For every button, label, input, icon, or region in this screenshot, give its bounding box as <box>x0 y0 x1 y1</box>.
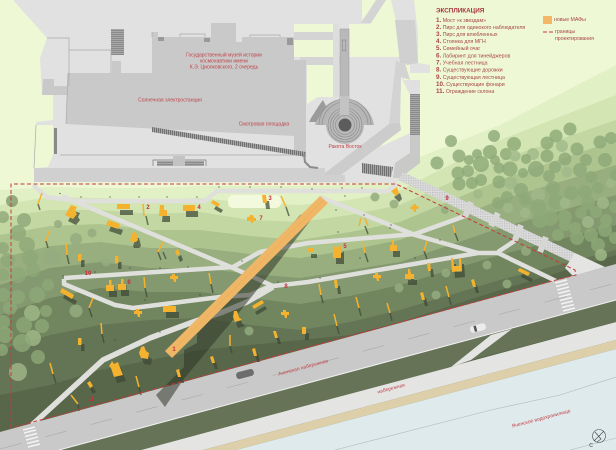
existing paths <box>32 183 556 425</box>
museum roof <box>42 23 306 154</box>
legend: project boundary: границы <box>555 29 575 35</box>
numbered markers: 9 <box>445 196 449 202</box>
map labels: Яченское водохранилище <box>511 408 571 430</box>
map labels: космонавтики имени <box>200 58 248 64</box>
explication list: 9. Существующая лестница <box>436 74 505 81</box>
icon: compass: С <box>589 443 593 449</box>
map labels <box>138 52 571 430</box>
explication list: 1. Мост «к звездам» <box>436 17 486 24</box>
map labels: Смотровая площадка <box>239 122 289 128</box>
numbered markers: 3 <box>268 196 272 202</box>
legend: project boundary <box>543 29 594 42</box>
explication list: 6. Лабиринт для тинейджеров <box>436 52 510 60</box>
amphitheatre <box>309 96 374 144</box>
curved stair by viewing deck <box>304 154 318 168</box>
tree cluster right <box>430 122 616 261</box>
legend: new MAF: новые МАФы <box>554 17 586 23</box>
explication list: 2. Пирс для одинокого наблюдателя <box>436 24 525 31</box>
numbered markers: 8 <box>284 284 288 290</box>
numbered markers: 2 <box>146 205 150 211</box>
map labels: Солнечная электростанция <box>138 98 202 104</box>
map labels: Государственный музей истории <box>186 52 262 58</box>
tree cluster left <box>0 195 54 381</box>
explication list <box>436 17 525 95</box>
numbered markers <box>85 196 449 403</box>
staircase 9 <box>398 172 575 262</box>
museum grounds and plaza <box>13 0 430 183</box>
explication list: 4. Стоянка для МГН <box>436 38 486 45</box>
embankment road and strips <box>0 253 616 450</box>
numbered markers: 4 <box>197 205 201 211</box>
numbered markers: 6 <box>127 280 131 286</box>
explication list: 5. Семейный очаг <box>436 45 480 52</box>
numbered markers: 7 <box>259 216 263 222</box>
pale terrace near pier 3 <box>228 195 281 208</box>
MAF shadows <box>38 193 533 411</box>
icon: compass <box>589 430 606 449</box>
map labels: набережная <box>377 382 406 396</box>
east stairs column <box>362 80 420 178</box>
cars <box>235 323 487 380</box>
diagonal staircase <box>152 127 306 157</box>
lamp dots (existing lanterns) <box>59 186 441 341</box>
building outlines <box>34 32 300 168</box>
numbered markers: 1 <box>172 347 176 353</box>
map labels: Анинская набережная <box>278 358 329 378</box>
numbered markers: 11 <box>88 397 95 403</box>
explication list: 7. Учебная лестница <box>436 60 488 66</box>
legend title: ЭКСПЛИКАЦИЯ <box>436 8 485 14</box>
bridge to the stars <box>165 196 328 358</box>
explication list: 10. Существующие фонари <box>436 81 505 88</box>
map labels: К.Э. Циолковского, 2 очередь <box>190 64 259 70</box>
entrance stairs <box>153 156 206 166</box>
numbered markers: 5 <box>343 244 347 250</box>
explication list: 11. Ограждение склона <box>436 88 494 95</box>
pedestrian crossings <box>23 280 575 447</box>
explication list: 8. Существующие дорожки <box>436 66 503 74</box>
new MAF elements <box>38 187 530 404</box>
explication list: 3. Пирс для влюбленных <box>436 31 498 38</box>
legend: new MAF <box>543 16 586 24</box>
numbered markers: 10 <box>85 271 92 277</box>
map labels: Ракета Восток <box>328 144 362 150</box>
monument Vostok rocket <box>340 29 349 115</box>
project boundary <box>11 184 576 428</box>
bridge shadow <box>156 208 320 407</box>
light trees inside project area <box>44 192 531 336</box>
legend: project boundary: проектирования <box>555 36 594 42</box>
